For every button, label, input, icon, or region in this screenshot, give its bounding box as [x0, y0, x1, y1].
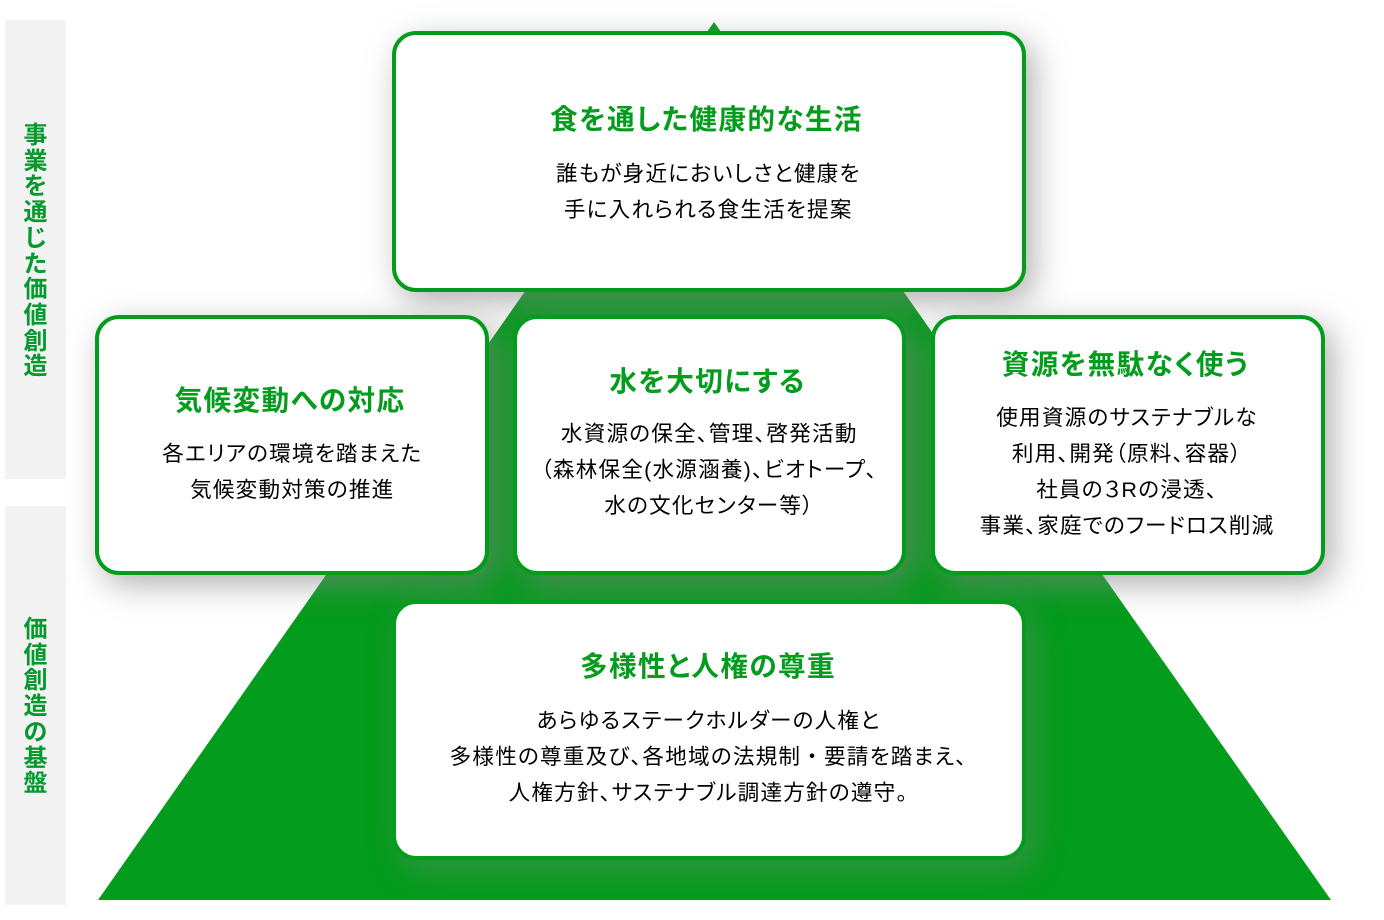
side label: 事業を通じた価値創造: を	[24, 173, 48, 200]
text: food and health: 手に入れられる食生活を提案	[564, 197, 853, 222]
text: climate change: 気候変動対策の推進	[190, 477, 394, 502]
heading: resources: 資源を無駄なく使う	[1002, 349, 1249, 380]
text: water: 水資源の保全、管理、啓発活動	[561, 421, 858, 446]
side label: 価値創造の基盤: 盤	[24, 770, 48, 797]
side label: 価値創造の基盤: の	[24, 719, 48, 746]
side label: 事業を通じた価値創造: 業	[24, 148, 48, 175]
heading: climate change: 気候変動への対応	[175, 385, 405, 416]
side label: 事業を通じた価値創造: 創	[24, 328, 48, 355]
side label: 事業を通じた価値創造: じ	[24, 225, 48, 252]
text: climate change	[162, 441, 422, 502]
side panel: foundation of value creation	[5, 506, 66, 905]
side label: 価値創造の基盤	[24, 616, 48, 797]
card: water	[513, 315, 906, 575]
text: climate change: 各エリアの環境を踏まえた	[162, 441, 422, 466]
side label: 事業を通じた価値創造: 通	[24, 199, 48, 226]
text: diversity and human rights: あらゆるステークホルダーの人権と	[537, 708, 880, 733]
side label: 事業を通じた価値創造: た	[24, 251, 48, 278]
text: diversity and human rights	[450, 708, 967, 805]
side label: 事業を通じた価値創造: 事	[24, 122, 48, 149]
text: diversity and human rights: 人権方針、サステナブル調達方針の遵守。	[509, 780, 908, 805]
card: diversity and human rights	[392, 600, 1026, 860]
heading: food and health: 食を通した健康的な生活	[550, 104, 863, 135]
side label: 事業を通じた価値創造: 造	[24, 353, 48, 380]
heading: water: 水を大切にする	[609, 366, 806, 397]
card: resources	[931, 315, 1325, 575]
text: water: 水の文化センター等）	[604, 493, 814, 518]
text: resources: 使用資源のサステナブルな	[996, 405, 1258, 430]
text: food and health	[556, 161, 861, 222]
side label: 価値創造の基盤: 値	[24, 642, 48, 669]
side label: 事業を通じた価値創造: 価	[24, 276, 48, 303]
text: resources: 事業、家庭でのフードロス削減	[980, 513, 1274, 538]
side panel: value through business	[5, 20, 66, 479]
card: food and health	[392, 31, 1026, 292]
text: resources	[980, 405, 1274, 538]
text: water: （森林保全(水源涵養)、ビオトープ、	[541, 457, 878, 482]
card: climate change	[95, 315, 489, 575]
heading: diversity and human rights: 多様性と人権の尊重	[580, 651, 836, 682]
text: diversity and human rights: 多様性の尊重及び、各地域の法規制・要請を踏まえ、	[450, 744, 967, 769]
side label: 価値創造の基盤: 創	[24, 667, 48, 694]
side label: 価値創造の基盤: 基	[24, 745, 48, 772]
text: resources: 利用、開発（原料、容器）	[1012, 441, 1242, 466]
text: resources: 社員の３Rの浸透、	[1036, 477, 1218, 502]
side label: 事業を通じた価値創造: 値	[24, 302, 48, 329]
side label: 価値創造の基盤: 価	[24, 616, 48, 643]
side label: 価値創造の基盤: 造	[24, 693, 48, 720]
text: food and health: 誰もが身近においしさと健康を	[556, 161, 861, 186]
side label: 事業を通じた価値創造	[24, 122, 48, 380]
text: water	[541, 421, 878, 518]
